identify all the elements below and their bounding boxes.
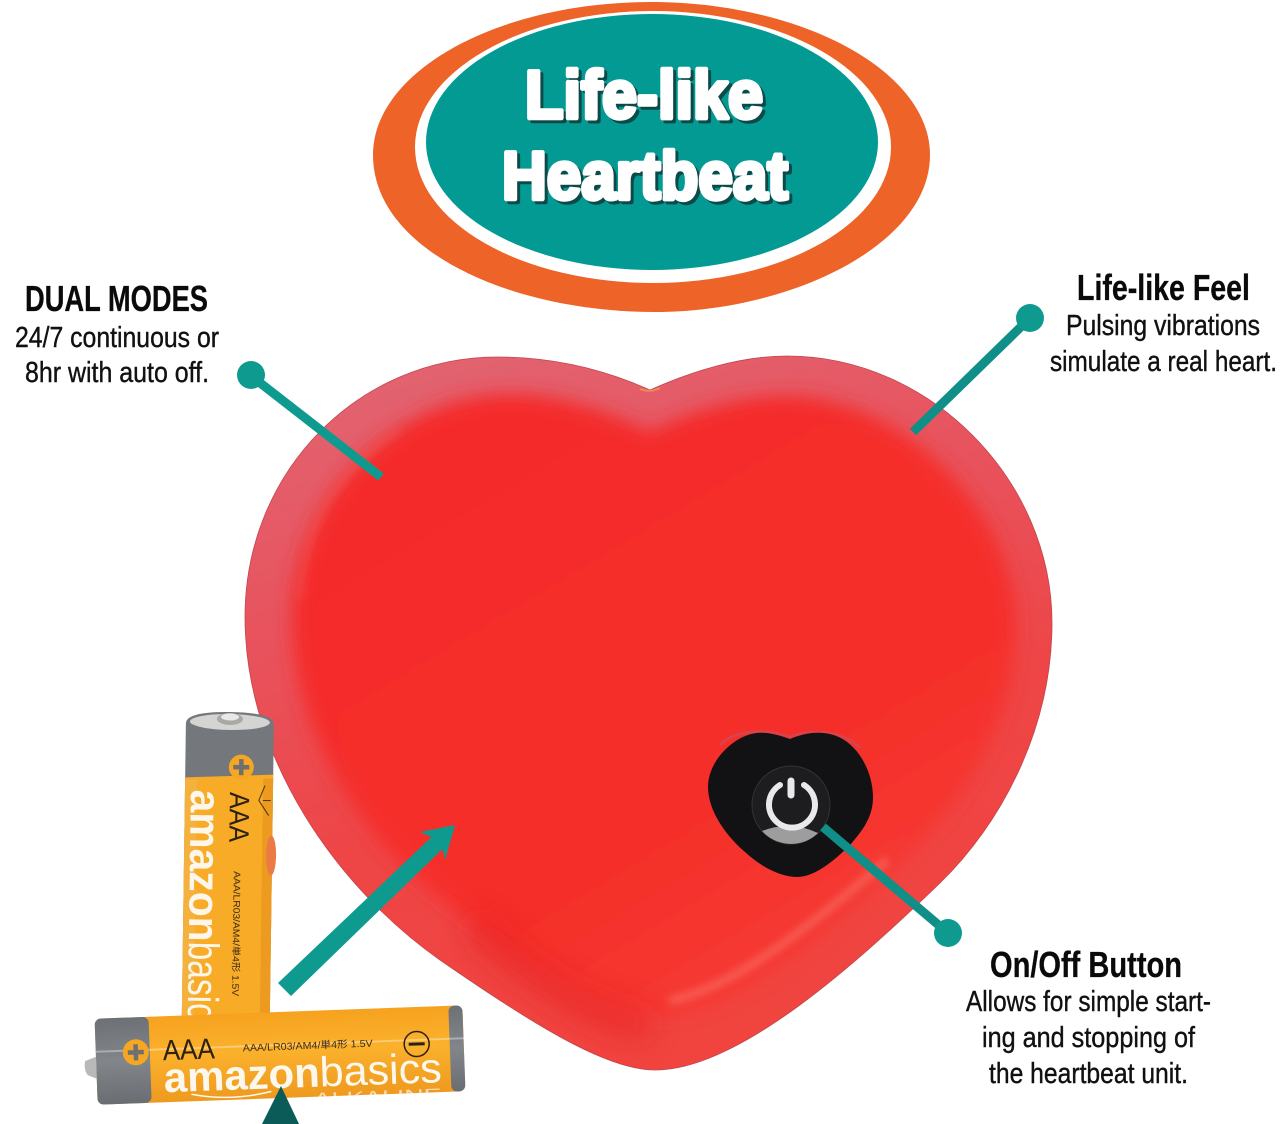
title text (502, 57, 791, 217)
on/off body (966, 986, 1211, 1090)
button plate (708, 732, 873, 877)
horizontal battery body: basics (319, 1044, 442, 1096)
vertical battery body: AAA/LR03/AM4/単4形 1.5V (229, 871, 243, 997)
horizontal battery body: amazon (163, 1049, 321, 1101)
icon: power symbol (769, 781, 815, 828)
badge white ring (415, 11, 891, 283)
title text: Heartbeat (505, 141, 791, 217)
vertical battery body: amazon (179, 789, 229, 942)
dual modes heading: DUAL MODES (25, 278, 208, 319)
title badge (373, 2, 930, 312)
battery: horizontal AAA (84, 1006, 466, 1104)
arrow pointing to heart (278, 825, 455, 996)
dual modes pointer (237, 361, 381, 477)
title text: Life-like (528, 60, 766, 136)
badge teal centre (426, 14, 878, 270)
horizontal battery body (84, 1006, 466, 1104)
vertical battery body (178, 711, 278, 1038)
on/off body: ing and stopping of (982, 1022, 1196, 1054)
life-like feel pointer (913, 304, 1044, 432)
dual modes body (15, 322, 219, 389)
title text: Heartbeat (502, 138, 788, 214)
heart shading (292, 388, 1016, 1024)
on/off body: Allows for simple start- (966, 986, 1211, 1018)
badge orange outer oval (373, 2, 930, 312)
dual modes body: 24/7 continuous or (15, 322, 219, 354)
red heart device (245, 356, 1052, 1070)
horizontal battery body: ALKALINE (313, 1085, 442, 1109)
on/off heading: On/Off Button (990, 944, 1182, 985)
on/off body: the heartbeat unit. (989, 1058, 1188, 1090)
title text: Life-like (525, 57, 763, 133)
on/off pointer (823, 827, 962, 947)
life-like feel body (1050, 310, 1277, 378)
vertical battery body: basics (178, 941, 227, 1037)
vertical battery body: AAA (223, 792, 255, 843)
horizontal battery body: AAA/LR03/AM4/単4形 1.5V (242, 1037, 373, 1054)
callout: on/off button (823, 827, 1211, 1090)
dual modes body: 8hr with auto off. (25, 357, 209, 389)
battery: vertical AAA (178, 711, 278, 1038)
dark teal triangle marker (262, 1086, 299, 1124)
callout: life-like feel (913, 267, 1277, 432)
horizontal battery body: AAA (162, 1033, 216, 1067)
callout: dual modes (15, 278, 381, 477)
heart body rim (245, 356, 1052, 1070)
